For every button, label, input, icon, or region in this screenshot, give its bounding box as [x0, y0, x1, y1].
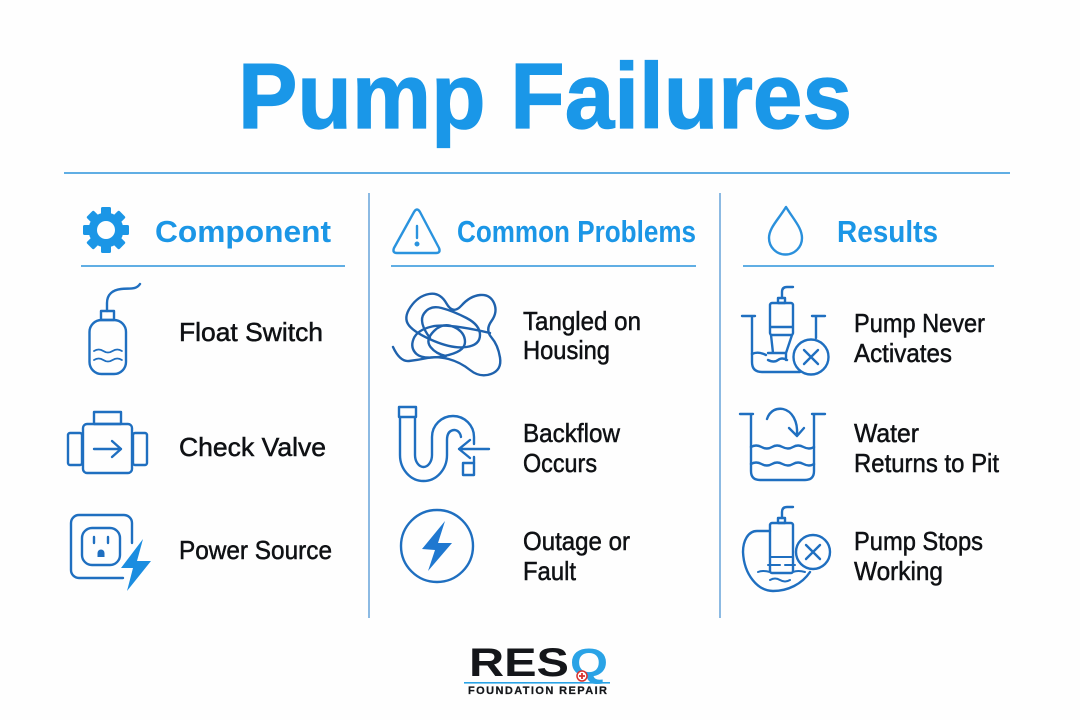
label: pump never activates: [854, 308, 985, 368]
label: backflow occurs: [523, 418, 620, 478]
heading: component: Component: [155, 214, 331, 249]
label: water returns to pit: Water: [854, 418, 919, 448]
title: Pump Failures: [238, 44, 852, 148]
panel: common problems: [391, 210, 696, 586]
label: tangled on housing: Housing: [523, 335, 610, 365]
label: outage or fault: Outage or: [523, 526, 630, 556]
label: float switch: Float Switch: [179, 317, 323, 347]
label: pump stops working: Pump Stops: [854, 526, 983, 556]
label: water returns to pit: Returns to Pit: [854, 448, 1000, 478]
icon: float switch: [90, 284, 140, 374]
label: backflow occurs: Backflow: [523, 418, 620, 448]
label: check valve: Check Valve: [179, 432, 326, 462]
icon: check valve: [68, 412, 147, 473]
icon: warning triangle: [393, 210, 440, 253]
icon: tangled cord: [393, 294, 500, 375]
label: backflow occurs: Occurs: [523, 448, 597, 478]
icon: pump stops working: [743, 507, 830, 591]
icon: trap pipe with backflow arrow: [399, 407, 489, 481]
label: pump stops working: Working: [854, 556, 943, 586]
icon: pump never activates: [742, 287, 828, 374]
label: outage or fault: Fault: [523, 556, 577, 586]
label: pump never activates: Activates: [854, 338, 952, 368]
label: outage or fault: [523, 526, 630, 586]
panel: results: [740, 207, 1000, 591]
label: tangled on housing: Tangled on: [523, 306, 641, 336]
heading: common problems: Common Problems: [457, 214, 696, 249]
icon: bolt in circle: [401, 510, 473, 582]
label: pump stops working: [854, 526, 983, 586]
label: power source: Power Source: [179, 535, 332, 565]
logo: ResQ Foundation Repair: RES: [469, 641, 569, 685]
logo: ResQ Foundation Repair: [464, 641, 610, 697]
icon: water drop: [769, 207, 802, 255]
icon: water returns to pit: [740, 409, 825, 480]
icon: power outlet with bolt: [71, 515, 151, 591]
logo: ResQ Foundation Repair: FOUNDATION REPAIR: [468, 685, 607, 697]
label: pump never activates: Pump Never: [854, 308, 985, 338]
logo: ResQ Foundation Repair: Q: [570, 641, 608, 685]
label: water returns to pit: [854, 418, 1000, 478]
icon: gear: [83, 207, 129, 253]
label: tangled on housing: [523, 306, 641, 365]
panel: component: [68, 207, 345, 591]
heading: results: Results: [837, 214, 938, 249]
